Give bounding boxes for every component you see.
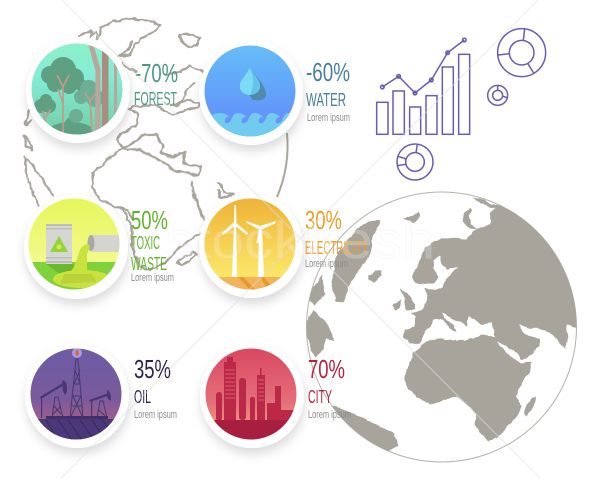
South America [327, 407, 398, 452]
donut chart large [498, 29, 546, 77]
North America [303, 310, 335, 357]
toxic label: TOXIC [131, 232, 160, 253]
panel: water [199, 41, 350, 145]
Eurasia [403, 197, 580, 360]
watermark lines [60, 0, 540, 479]
toxic waste percent: 50% [131, 207, 168, 235]
oil label: OIL [134, 386, 151, 407]
Iceland [368, 270, 382, 282]
water caption: Lorem ipsum [307, 112, 350, 124]
electricity badge [199, 194, 303, 298]
Britain [400, 288, 415, 312]
Arctic Canada [310, 274, 326, 306]
donut chart medium [397, 144, 433, 180]
oil caption: Lorem ipsum [134, 409, 177, 421]
outline Africa south [110, 205, 200, 270]
panel: oil [25, 344, 177, 448]
panel: forest [26, 39, 178, 143]
bar chart [377, 54, 470, 134]
Ireland [393, 300, 402, 310]
outline Europe and Africa [92, 63, 202, 220]
forest label: FOREST [134, 88, 177, 109]
outline world map [24, 19, 233, 270]
oil percent: 35% [134, 356, 171, 384]
panel: toxic waste [24, 195, 174, 299]
watermark text: stockfresh [165, 212, 435, 270]
water percent: -60% [306, 59, 350, 87]
filled globe [303, 192, 580, 462]
Svalbard [403, 212, 420, 223]
outline Madagascar [177, 252, 197, 265]
Greenland [332, 220, 380, 302]
outline Greenland [80, 19, 161, 56]
line chart [380, 38, 466, 95]
water badge [199, 41, 303, 145]
waste label: WASTE [131, 253, 167, 274]
toxic waste caption: Lorem ipsum [131, 272, 174, 284]
water label: WATER [306, 89, 346, 110]
outline globe arc [277, 133, 288, 197]
city badge [200, 344, 304, 448]
globe land masses [303, 197, 580, 452]
electricity label: ELECTRICITY [305, 237, 368, 258]
chart group [377, 29, 546, 180]
electricity percent: 30% [305, 207, 342, 235]
panel: electricity [199, 194, 368, 298]
Madagascar [524, 397, 536, 417]
outline Iceland [179, 34, 200, 47]
panel: city [200, 344, 351, 448]
forest percent: -70% [135, 60, 178, 88]
globe ring [306, 192, 576, 462]
Africa [403, 335, 532, 442]
donut chart small [488, 85, 508, 105]
outline Red Sea strokes [192, 182, 233, 220]
forest badge [26, 39, 130, 143]
outline America fragments [24, 111, 52, 205]
city label: CITY [308, 386, 332, 407]
Novaya Zemlya [463, 208, 477, 228]
toxic waste badge [24, 195, 128, 299]
city caption: Lorem ipsum [308, 409, 351, 421]
city percent: 70% [308, 356, 345, 384]
oil badge [25, 344, 129, 448]
electricity caption: Lorem ipsum [305, 258, 348, 270]
